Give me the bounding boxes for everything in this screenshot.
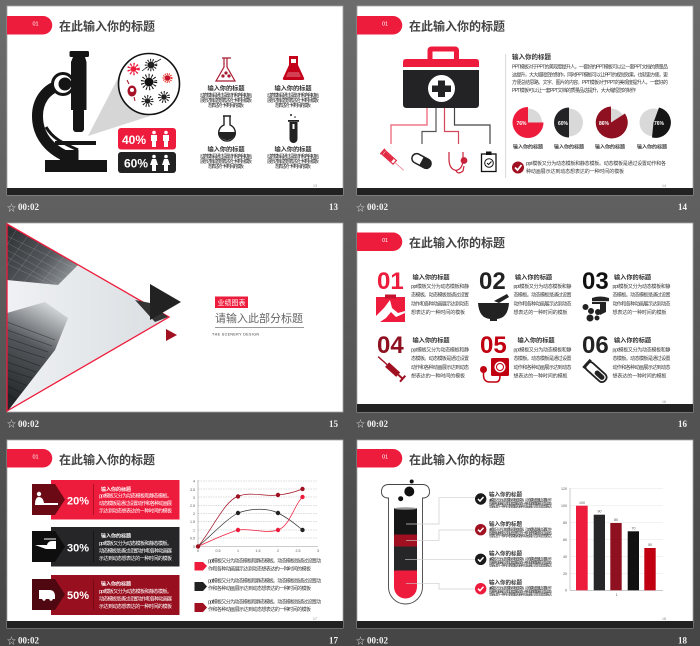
line chart: 2: [277, 549, 279, 553]
icon: round flask: [219, 116, 235, 141]
bar: 30 percent: 示达到动态想表达的一种时间的模板: [99, 555, 172, 562]
check item 4: 和各种动画展示达到动态想表达的一种时间的模板展示达到动态: [489, 588, 552, 594]
text: item 1: 输入你的标题: [207, 84, 245, 92]
text: item 1: 想表达的一种时间的模板: [208, 102, 244, 109]
text: check note: [526, 160, 666, 175]
bar chart: 120: [561, 487, 567, 491]
bar chart: 70: [632, 526, 636, 530]
check item 2: 想表达的一种时间的模板和各种动画展示达到动态想表达: [489, 533, 552, 538]
pie labels: 输入你的标题: [637, 144, 667, 150]
line chart: 2: [193, 512, 195, 516]
text: item 1: 动态模板是通过设置动作和各种动画: [200, 92, 252, 99]
item 04: 动作和各种动画展示达到动态: [411, 364, 469, 371]
check item 4: ppt模板又分为动态模板和静态模板。动态模板是通过设置动作: [489, 585, 552, 590]
chart: pie 86 percent: [596, 106, 628, 138]
footer bar: [357, 188, 693, 195]
caption: slide 16 timing: [356, 419, 688, 429]
bar chart: 1: [616, 593, 618, 597]
caption: slide 15 timing: 15: [329, 419, 338, 429]
black triangle: [150, 284, 181, 320]
section pill: 01: [32, 454, 39, 460]
caption: slide 16 timing: 16: [678, 419, 688, 429]
caption: slide 15 timing: [7, 419, 338, 429]
bar: 50 percent: 输入你的标题: [101, 580, 131, 588]
photo triangle: [7, 224, 172, 412]
legend: red: 作和各种动画展示达到动态想表达的一种时间的模板: [208, 566, 311, 572]
caption: slide 17 timing: [7, 636, 338, 646]
caption: slide 16 timing: ☆: [356, 419, 365, 429]
item 05: [480, 332, 572, 382]
caption: slide 14 timing: 14: [678, 202, 688, 212]
item 03: 输入你的标题: [614, 274, 652, 282]
chart: pie 76 percent: [512, 107, 544, 138]
text: item 3: 动态模板是通过设置动作和各种动画: [200, 153, 252, 160]
caption: slide 13 timing: 00:02: [18, 202, 39, 212]
bar chart: 100: [579, 501, 585, 505]
line chart: 0.5: [216, 549, 220, 553]
text: item 3: 想表达的一种时间的模板: [208, 163, 244, 170]
caption: slide 18 timing: ☆: [356, 636, 365, 646]
item 02: 想表达的一种时间的模板: [514, 309, 568, 316]
footer bar: [7, 188, 343, 195]
connectors: [405, 498, 475, 589]
dark building sliver: [135, 300, 168, 322]
chart: pie 76 percent dark: [640, 108, 671, 138]
check item 1: 想表达的一种时间的模板和各种动画展示达到动态想表达: [489, 504, 552, 508]
check item 2: ppt模板又分为动态模板和静态模板。动态模板是通过设置动作: [489, 526, 552, 532]
heading: 在此输入你的标题: [59, 452, 155, 467]
small red triangle: [166, 329, 177, 341]
legend: dark red: 作和各种动画展示达到动态想表达的一种时间的模板: [208, 606, 311, 613]
legend: black: [194, 578, 321, 592]
chart: pie 60 percent: 60%: [558, 121, 569, 127]
item 03: 动作和各种动画展示达到动态: [612, 300, 670, 308]
footer bar: [357, 621, 693, 628]
check item 3: ppt模板又分为动态模板和静态模板。动态模板是通过设置动作: [489, 556, 552, 561]
check item 2: 和各种动画展示达到动态想表达的一种时间的模板展示达到动态: [489, 530, 552, 535]
pie labels: [513, 144, 667, 150]
icon: test tube: [288, 114, 299, 143]
text: intro paragraph: 方便总结思路、文字、图片的内容。PPT模板对于PPT的美观度提升人，一套好的: [512, 79, 668, 86]
caption: slide 16 timing: 00:02: [367, 419, 388, 429]
page number small: 13: [313, 184, 317, 188]
panel: slide 18 test tube and bars: [357, 440, 693, 628]
check item 3: 和各种动画展示达到动态想表达的一种时间的模板展示达到动态: [489, 560, 552, 564]
line chart: 3: [317, 549, 319, 553]
check item 2: 输入你的标题: [489, 520, 523, 528]
caption: slide 14 timing: [356, 202, 688, 213]
bar chart: 40: [563, 555, 567, 559]
pie labels: 输入你的标题: [513, 144, 543, 150]
caption: slide 18 timing: 00:02: [367, 636, 388, 646]
bar chart: 0: [565, 588, 567, 592]
check item 4: 想表达的一种时间的模板和各种动画展示达到动态想表达: [489, 592, 552, 596]
bar: 20 percent: 20%: [67, 496, 89, 508]
heading: 在此输入你的标题: [409, 18, 505, 34]
line chart: 2.5: [296, 549, 300, 553]
line chart: 4: [193, 480, 195, 484]
section pill: 01: [382, 22, 388, 28]
60 percent female badge: [118, 152, 176, 173]
text: item 2: 输入你的标题: [274, 84, 312, 92]
bar chart: 60: [563, 538, 567, 542]
text: item 3: 展示达到动态想表达的一种时间模板: [200, 158, 252, 165]
text: item 1: 展示达到动态想表达的一种时间模板: [200, 97, 252, 104]
item 05: 输入你的标题: [518, 336, 555, 344]
icon: filled flask: [283, 56, 304, 80]
item 06: 态模板。动态模板是通过设置: [612, 355, 670, 362]
magnified circle with viruses: [118, 54, 180, 114]
badge: [215, 296, 248, 308]
page number small: 16: [662, 400, 666, 404]
light cone: [88, 76, 150, 136]
item 02: ppt模板又分为动态模板和静: [514, 283, 572, 290]
item 02: 02: [479, 268, 506, 295]
item 01: ppt模板又分为动态模板和静: [411, 283, 469, 290]
section title: 请输入此部分标题: [215, 311, 303, 325]
test tube illustration: [381, 480, 430, 604]
icon: capsule: [409, 151, 434, 171]
icon: stethoscope: [449, 152, 467, 173]
bar: 30 percent: 30%: [67, 542, 89, 554]
bar: 20 percent: 输入你的标题: [101, 486, 131, 493]
bar: 20 percent: ppt模板又分为动态模板和静态模板。: [99, 492, 172, 500]
panel: slide 13 microscope: [7, 6, 343, 195]
item 01: [376, 268, 469, 322]
item 02: [478, 268, 572, 321]
section pill: [7, 449, 52, 468]
bar chart: 50: [648, 543, 652, 547]
caption: slide 18 timing: [356, 636, 688, 646]
pie labels: 输入你的标题: [595, 144, 625, 150]
item 06: 06: [582, 332, 609, 359]
panel: slide 16 six items: [357, 223, 693, 412]
icon: microscope: [38, 51, 107, 172]
text: item 4: 展示达到动态想表达的一种时间模板: [267, 158, 319, 165]
panel: slide 14 medical kit: [357, 6, 693, 195]
check item 4: [475, 578, 552, 596]
line chart: 2.5: [190, 504, 195, 508]
heading: 在此输入你的标题: [409, 452, 505, 467]
section pill: [357, 16, 402, 34]
text: item 4: 动态模板是通过设置动作和各种动画: [267, 153, 319, 160]
text: item 2: 动态模板是通过设置动作和各种动画: [267, 92, 319, 99]
legend: black: ppt模板又分为动态模板和静态模板。动态模板是通过设置动: [208, 578, 321, 584]
40 percent male badge: 40%: [122, 133, 146, 147]
subtitle: THE SCENERY DESIGN: [212, 332, 259, 336]
caption: slide 15 timing: 00:02: [18, 419, 39, 429]
item 03: 03: [582, 268, 609, 295]
caption: slide 18 timing: 18: [678, 636, 688, 646]
section pill: 01: [382, 238, 388, 244]
bar: 20 percent: [32, 480, 180, 520]
check item 1: 输入你的标题: [489, 490, 523, 498]
text: item 2: 想表达的一种时间的模板: [275, 102, 311, 109]
item 03: 想表达的一种时间的模板: [612, 309, 666, 316]
chart: pie 86 percent: 86%: [599, 121, 610, 127]
item 05: ppt模板又分为动态模板和静: [514, 346, 572, 354]
item 02: 动作和各种动画展示达到动态: [514, 300, 572, 308]
check item 3: [475, 550, 552, 568]
item 05: 态模板。动态模板是通过设置: [514, 355, 572, 362]
60 percent female badge: 60%: [124, 156, 148, 170]
panel: slide 15 section divider: [7, 223, 343, 412]
legend: red: [194, 558, 321, 572]
item 01: 输入你的标题: [412, 274, 450, 282]
bar chart: 90: [598, 510, 602, 514]
bar chart: 80: [563, 521, 567, 525]
badge: 业绩图表: [218, 298, 246, 307]
icon: check badge: [512, 162, 524, 174]
item 05: 想表达的一种时间的模板: [514, 372, 568, 380]
text: intro paragraph: PPT模板可以让一套PPT文档的质量品这提升，大大缩短您的制作: [512, 87, 636, 94]
line chart: 3.5: [190, 488, 195, 492]
heading: 在此输入你的标题: [59, 18, 155, 34]
connector lines: [391, 108, 490, 144]
bar: 30 percent: 输入你的标题: [101, 532, 131, 540]
divider: [504, 54, 507, 178]
item 01: 想表达的一种时间的模板: [411, 309, 465, 316]
text: check note: ppt模板又分为动态模板和静态模板。动态模板是通过设置动作和各: [526, 160, 666, 167]
item 06: 输入你的标题: [614, 336, 652, 344]
underline: [215, 327, 304, 328]
icon: outline flask: [216, 58, 235, 81]
item 01: 01: [377, 268, 404, 295]
item 01: 动作和各种动画展示达到动态: [411, 300, 469, 308]
item 06: ppt模板又分为动态模板和静: [612, 346, 670, 354]
legend: red: ppt模板又分为动态模板和静态模板。动态模板是通过设置动: [208, 558, 321, 564]
item 04: 04: [377, 332, 404, 359]
caption: slide 14 timing: ☆: [356, 203, 365, 213]
page number small: 14: [662, 184, 666, 188]
text: intro paragraph: [512, 52, 668, 94]
bar: 20 percent: 动态模板是通过设置动作和各种动画展: [99, 500, 172, 507]
bar chart: 80: [614, 518, 618, 522]
bar: 50 percent: ppt模板又分为动态模板和静态模板。: [99, 588, 172, 595]
icon: clipboard: [482, 152, 496, 172]
check item 3: 想表达的一种时间的模板和各种动画展示达到动态想表达: [489, 562, 552, 568]
text: intro paragraph: PPT模板对于PPT的美观度提升人，一套好的PPT模板可以让一套PPT文档的质量品: [512, 64, 668, 70]
item 04: ppt模板又分为动态模板和静: [411, 346, 469, 354]
bar chart: [561, 487, 663, 597]
pie labels: 输入你的标题: [554, 144, 584, 150]
legend: dark red: ppt模板又分为动态模板和静态模板。动态模板是通过设置动: [208, 598, 321, 606]
chart: pie 60 percent: [554, 108, 583, 138]
heading: 在此输入你的标题: [409, 235, 505, 250]
bar chart: 100: [561, 504, 567, 508]
text: item 4: 输入你的标题: [274, 146, 312, 154]
panel: slide 17 percentages and line chart: [7, 440, 343, 628]
caption: slide 13 timing: [7, 202, 338, 213]
text: item 3: 输入你的标题: [207, 146, 245, 154]
line chart: 1: [237, 549, 239, 553]
item 03: 态模板。动态模板是通过设置: [612, 292, 670, 298]
40 percent male badge: [118, 128, 176, 150]
item 05: 动作和各种动画展示达到动态: [514, 364, 572, 371]
caption: slide 17 timing: ☆: [7, 636, 16, 646]
item 03: [582, 268, 670, 322]
line chart: 0: [197, 549, 199, 553]
caption: slide 17 timing: 17: [329, 636, 338, 646]
text: intro paragraph: 这提升，大大缩短您的制作，同时PPT模板可以让PPT的视觉效果，也就更方便，更: [512, 72, 668, 78]
check item 3: 输入你的标题: [489, 550, 523, 558]
section pill: 01: [382, 454, 388, 460]
line chart: 1: [193, 528, 195, 532]
item 04: 想表达的一种时间的模板: [411, 372, 465, 380]
caption: slide 14 timing: 00:02: [367, 202, 388, 212]
item 05: 05: [480, 332, 507, 359]
item 06: [582, 332, 670, 384]
item 04: [375, 332, 469, 382]
bar: 30 percent: ppt模板又分为动态模板和静态模板。: [99, 540, 172, 547]
footer bar: [7, 621, 343, 628]
bar chart: 20: [563, 572, 567, 576]
bar: 30 percent: [32, 527, 180, 566]
item 02: 态模板。动态模板是通过设置: [514, 292, 572, 298]
bar: 30 percent: 动态模板是通过设置动作和各种动画展: [99, 548, 172, 554]
item 06: 想表达的一种时间的模板: [612, 372, 666, 380]
item 04: 态模板。动态模板是通过设置: [411, 355, 469, 362]
line chart: 0: [193, 545, 195, 549]
text: item 4: 想表达的一种时间的模板: [275, 163, 311, 170]
item 03: ppt模板又分为动态模板和静: [612, 283, 670, 290]
check item 4: 输入你的标题: [489, 578, 523, 586]
section pill: 01: [32, 22, 39, 28]
line chart: 1.5: [256, 549, 260, 553]
icon: syringe: [380, 148, 406, 173]
check item 2: [475, 520, 552, 538]
text: item 2: 展示达到动态想表达的一种时间模板: [267, 97, 319, 104]
caption: slide 17 timing: 00:02: [18, 636, 39, 646]
caption: slide 13 timing: ☆: [7, 203, 16, 213]
caption: slide 13 timing: 13: [329, 202, 338, 212]
text: intro paragraph: 输入你的标题: [512, 52, 552, 61]
bar: 50 percent: 50%: [67, 590, 89, 602]
text: item 1: [200, 84, 252, 109]
section pill: [7, 16, 52, 34]
text: item 4: [267, 146, 319, 170]
check item 1: [475, 490, 552, 508]
text: item 3: [200, 146, 252, 170]
line chart: 3: [193, 496, 195, 500]
bar: 50 percent: 动态模板是通过设置动作和各种动画展: [99, 596, 172, 602]
page number small: 18: [662, 617, 666, 621]
check item 1: ppt模板又分为动态模板和静态模板。动态模板是通过设置动作: [489, 497, 552, 502]
item 02: 输入你的标题: [515, 274, 553, 282]
bar: 50 percent: 示达到动态想表达的一种时间的模板: [99, 603, 172, 610]
legend: dark red: [194, 598, 321, 613]
text: item 2: [267, 84, 319, 109]
legend: black: 作和各种动画展示达到动态想表达的一种时间的模板: [208, 585, 311, 592]
line chart: 1.5: [190, 520, 195, 524]
line chart: 0.5: [190, 536, 195, 540]
chart: pie 76 percent dark: 76%: [654, 121, 665, 127]
item 01: 态模板。动态模板是通过设置: [411, 292, 469, 298]
item 06: 动作和各种动画展示达到动态: [612, 364, 670, 371]
footer bar: [357, 404, 693, 412]
page number small: 17: [313, 617, 317, 621]
check item 1: 和各种动画展示达到动态想表达的一种时间的模板展示达到动态: [489, 500, 552, 506]
section pill: [357, 232, 402, 251]
caption: slide 15 timing: ☆: [7, 419, 16, 429]
chart: pie 76 percent: 76%: [516, 121, 527, 127]
bar: 50 percent: [32, 575, 180, 615]
line chart: [190, 480, 319, 553]
bar: 20 percent: 示达到动态想表达的一种时间的模板: [99, 508, 172, 514]
text: check note: 种动画展示达到动态想表达的一种时间的模板: [526, 168, 624, 175]
section pill: [357, 449, 402, 468]
item 04: 输入你的标题: [412, 336, 450, 344]
icon: first aid kit: [403, 49, 479, 108]
